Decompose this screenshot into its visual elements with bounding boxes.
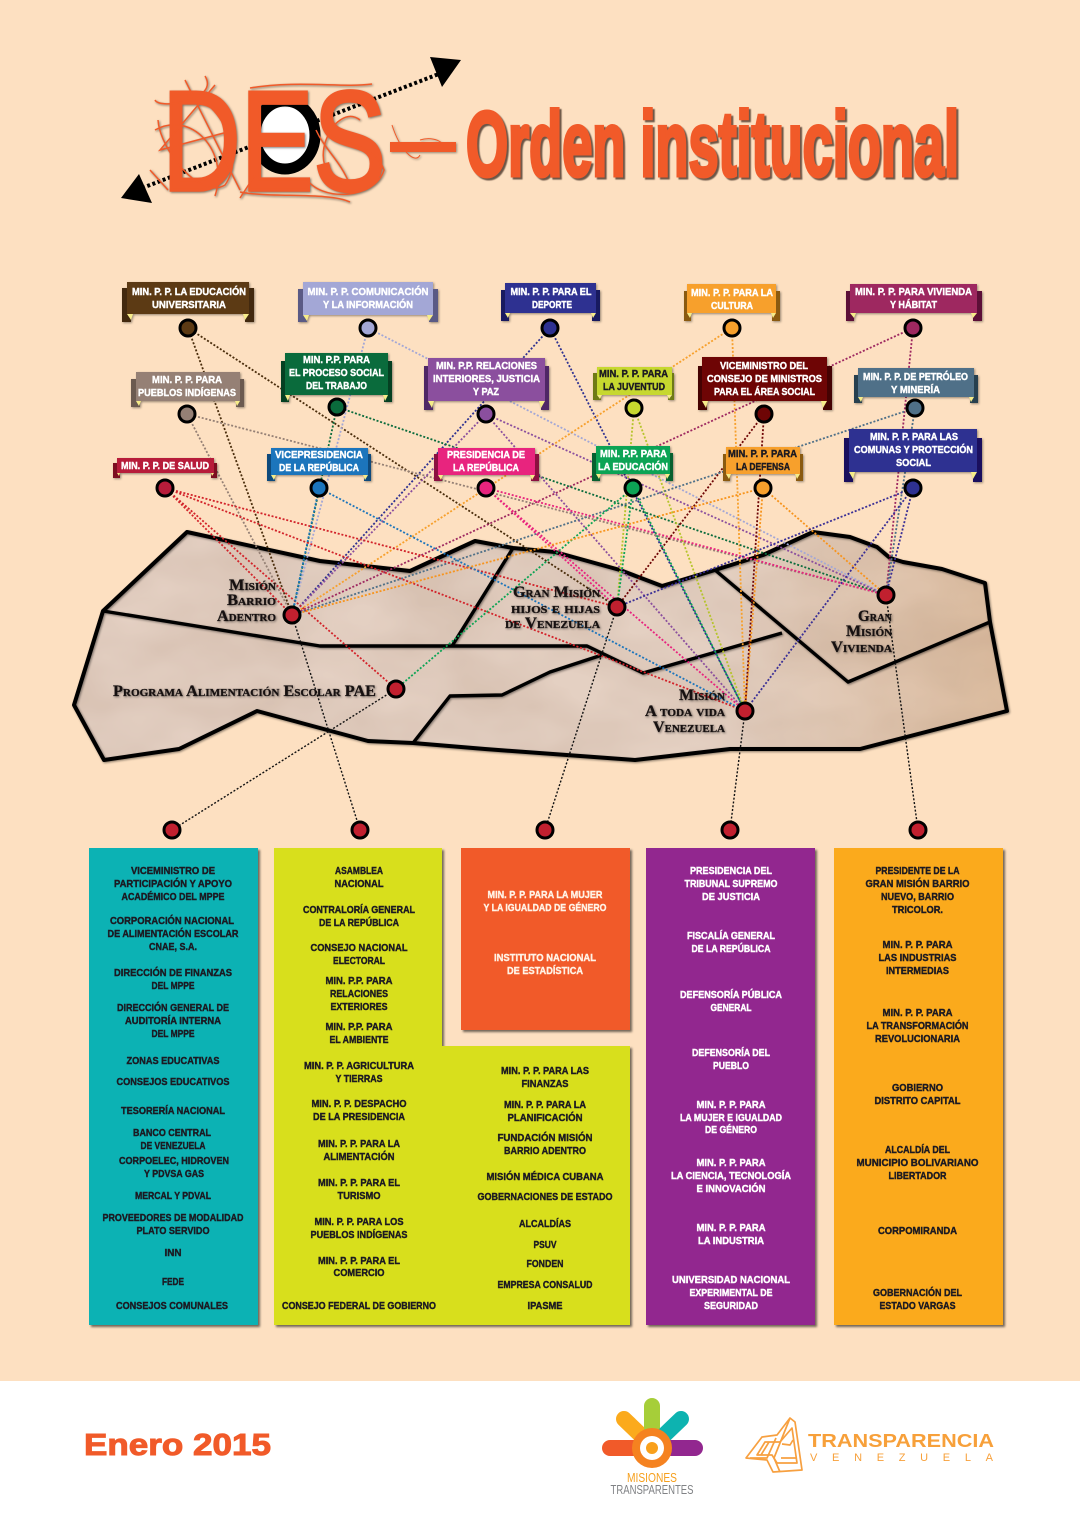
map label: Misión A toda vida Venezuela: Misión (679, 687, 725, 704)
panel: purple list (646, 848, 815, 1325)
banner: pueblos indígenas: PUEBLOS INDÍGENAS (138, 386, 236, 399)
map label: Gran Misión hijos e hijas: de Venezuela (505, 615, 600, 632)
panel: teal list: CNAE, S.A. (149, 941, 197, 953)
icon: double-headed dotted arrow (121, 57, 461, 203)
map of missions (74, 532, 1007, 760)
map outline and regions (74, 532, 1007, 760)
banner: defensa: LA DEFENSA (736, 461, 790, 473)
ministry nodes (157, 320, 923, 496)
line: youth (617, 408, 745, 711)
banner: educación universitaria: MIN. P. P. LA EDUCACIÓN (132, 285, 246, 298)
banner: cultura (684, 284, 780, 321)
map label: Gran Misión hijos e hijas (505, 584, 600, 632)
panel: lime list: CONSEJO FEDERAL DE GOBIERNO (282, 1300, 436, 1312)
mission nodes (284, 587, 894, 719)
line: health (165, 488, 745, 711)
panel: teal list: DEL MPPE (152, 1028, 194, 1040)
panel: teal list: Y PDVSA GAS (144, 1168, 204, 1180)
banner: vivienda: Y HÁBITAT (890, 298, 938, 311)
panel: teal list: FEDE (162, 1276, 184, 1288)
banner: relaciones interiores: Y PAZ (473, 386, 500, 398)
panel: amber list: CORPOMIRANDA (878, 1225, 957, 1237)
banner: viceministro consejo: CONSEJO DE MINISTROS (707, 373, 822, 385)
panel: lime list: CONSEJO NACIONAL (310, 942, 408, 954)
logo: Transparencia Venezuela (746, 1418, 994, 1472)
banner: comunas: COMUNAS Y PROTECCIÓN (854, 443, 973, 456)
panel: purple list: DEFENSORÍA DEL (692, 1046, 770, 1059)
banner: relaciones interiores: INTERIORES, JUSTICIA (433, 373, 540, 385)
panel: purple list: DE JUSTICIA (702, 891, 760, 903)
panel: lime list: Y TIERRAS (336, 1073, 382, 1085)
panel: lime list: GOBERNACIONES DE ESTADO (478, 1191, 612, 1203)
banner: viceministro consejo (698, 357, 832, 410)
panel: teal list: MERCAL Y PDVAL (135, 1190, 211, 1202)
banner: petróleo y minería: Y MINERÍA (891, 383, 940, 396)
panel: lime list: MIN. P. P. PARA LOS (314, 1216, 404, 1228)
panel: purple list: UNIVERSIDAD NACIONAL (672, 1274, 791, 1286)
panel: lime list: EL AMBIENTE (330, 1034, 388, 1046)
banner: proceso social del trabajo: MIN. P.P. PARA (303, 354, 370, 366)
line: indigenous (187, 414, 886, 615)
panel: amber list: INTERMEDIAS (886, 965, 949, 977)
banner: juventud: LA JUVENTUD (603, 381, 665, 393)
panel: amber list: MIN. P. P. PARA (882, 1007, 953, 1019)
panel: purple list: EXPERIMENTAL DE (690, 1287, 772, 1299)
date: Enero 2015: Enero 2015 (84, 1427, 271, 1462)
panel: purple list: PRESIDENCIA DEL (690, 865, 772, 877)
panel: teal list: CORPOELEC, HIDROVEN (119, 1155, 229, 1167)
banner: defensa: MIN. P. P. PARA (728, 448, 797, 460)
panel: lime list (274, 848, 630, 1325)
line: defence (292, 488, 886, 711)
banner: defensa (723, 447, 803, 481)
panel: purple list: TRIBUNAL SUPREMO (684, 878, 778, 890)
panel: amber list: LAS INDUSTRIAS (878, 952, 956, 964)
panel: lime list: PSUV (534, 1239, 556, 1251)
banner: proceso social del trabajo (281, 353, 392, 402)
banner: vicepresidencia: VICEPRESIDENCIA (275, 449, 363, 461)
panel: lime list: IPASME (528, 1300, 562, 1312)
panel: purple list: SEGURIDAD (704, 1300, 758, 1312)
panel: lime list: NACIONAL (334, 878, 384, 890)
panel: orange list: INSTITUTO NACIONAL (494, 952, 597, 964)
panel: purple list: E INNOVACIÓN (696, 1182, 766, 1195)
map paper shape (74, 532, 1007, 760)
panel: purple list: LA INDUSTRIA (698, 1235, 764, 1247)
panel: purple list: FISCALÍA GENERAL (687, 929, 776, 942)
lower connector nodes (164, 822, 926, 838)
banner: presidencia: LA REPÚBLICA (453, 461, 519, 474)
panel: lime list: EXTERIORES (330, 1001, 388, 1013)
panel: lime list: MIN. P. P. AGRICULTURA (304, 1060, 414, 1072)
map label: Gran Misión hijos e hijas: Gran Misión (513, 584, 600, 601)
panel: amber list: LA TRANSFORMACIÓN (866, 1019, 968, 1032)
banner: cultura: CULTURA (711, 300, 753, 312)
panel: orange list: DE ESTADÍSTICA (507, 964, 583, 977)
panel: lime list: MIN. P. P. PARA LA (318, 1138, 400, 1150)
banner: vivienda (846, 284, 982, 321)
banner: educación universitaria: UNIVERSITARIA (152, 299, 226, 311)
panel: purple list: LA MUJER E IGUALDAD (680, 1112, 782, 1124)
map label: Gran Misión Vivienda (831, 608, 892, 656)
panel: purple list: GENERAL (710, 1002, 752, 1014)
banner: comunas (844, 429, 982, 482)
icon: impossible shape (746, 1418, 802, 1472)
panel: amber list: TRICOLOR. (892, 904, 943, 916)
banner: viceministro consejo: VICEMINISTRO DEL (720, 360, 809, 372)
panel: teal list: PROVEEDORES DE MODALIDAD (102, 1212, 244, 1224)
panel: amber list: ESTADO VARGAS (880, 1300, 956, 1312)
banner: deporte (501, 283, 600, 321)
panel: amber list: ALCALDÍA DEL (885, 1143, 950, 1156)
heading: dash (390, 125, 456, 158)
banner: comunicación: Y LA INFORMACIÓN (323, 298, 413, 311)
panel: teal list: CORPORACIÓN NACIONAL (110, 914, 235, 927)
panel: teal list: PARTICIPACIÓN Y APOYO (114, 877, 232, 890)
line: sport (292, 328, 745, 711)
map label: Misión Barrio Adentro: Barrio (227, 592, 276, 609)
banner: proceso social del trabajo: DEL TRABAJO (306, 380, 367, 392)
banner: presidencia (434, 448, 539, 481)
banner: educación universitaria (122, 282, 254, 322)
panel: amber list: DISTRITO CAPITAL (874, 1095, 961, 1107)
panel: teal list: DE ALIMENTACIÓN ESCOLAR (108, 927, 239, 940)
panel: lime list: MIN. P. P. PARA EL (318, 1255, 401, 1267)
panel: lime list: DE LA PRESIDENCIA (313, 1111, 405, 1123)
line: culture (292, 328, 745, 711)
panel: amber list: PRESIDENTE DE LA (876, 865, 960, 877)
map label: Programa Alimentación Escolar: Programa Alimentación Escolar PAE (113, 683, 376, 700)
banner: presidencia: PRESIDENCIA DE (447, 449, 525, 461)
panel: teal list: DE VENEZUELA (140, 1140, 206, 1152)
line: education univ. (188, 328, 617, 615)
panel: amber list: GOBIERNO (892, 1082, 943, 1094)
panel: lime list: COMERCIO (334, 1267, 384, 1279)
map label: Gran Misión Vivienda: Misión (846, 623, 892, 640)
map label: Misión A toda vida Venezuela (645, 687, 725, 736)
line: interior relations (292, 414, 886, 711)
panel: lime list: DE LA REPÚBLICA (319, 916, 399, 929)
panel: lime list: MIN. P. P. PARA LAS (501, 1065, 589, 1077)
panel: teal list: TESORERÍA NACIONAL (121, 1104, 226, 1117)
logo: Misiones Transparentes: MISIONES (627, 1471, 677, 1485)
panel: lime list: BARRIO ADENTRO (504, 1145, 586, 1157)
panel: lime list: MIN. P.P. PARA (326, 1021, 393, 1033)
logo: Transparencia Venezuela: VENEZUELA (810, 1452, 994, 1464)
banner: relaciones interiores (424, 358, 549, 410)
panel: teal list: CONSEJOS EDUCATIVOS (116, 1076, 230, 1088)
panel: amber list: LIBERTADOR (888, 1170, 947, 1182)
panel: purple list: DE LA REPÚBLICA (692, 942, 771, 955)
panel: lime list: MIN. P.P. PARA (326, 975, 393, 987)
map label: Gran Misión hijos e hijas: hijos e hijas (511, 600, 600, 617)
banner: petróleo y minería: MIN. P. P. DE PETRÓLEO (863, 370, 968, 383)
banner: viceministro consejo: PARA EL ÁREA SOCIAL (714, 385, 815, 398)
logo: Transparencia Venezuela: TRANSPARENCIA (808, 1431, 994, 1451)
banner: proceso social del trabajo: EL PROCESO SOCIAL (289, 367, 384, 379)
line: communes (617, 488, 913, 711)
line: vice-presidency (292, 488, 745, 711)
panel: purple list: DE GÉNERO (705, 1123, 757, 1136)
panel: teal list: VICEMINISTRO DE (131, 865, 215, 877)
panel: teal list: DIRECCIÓN DE FINANZAS (114, 966, 232, 979)
panel: amber list: GRAN MISIÓN BARRIO (866, 877, 970, 890)
map label: Gran Misión Vivienda: Vivienda (831, 639, 892, 656)
title: DES-Orden institucional (121, 57, 959, 221)
banner: educación: MIN. P.P. PARA (600, 448, 667, 460)
panel: purple list: LA CIENCIA, TECNOLOGÍA (671, 1169, 791, 1182)
panel: lime list: MIN. P. P. DESPACHO (312, 1098, 406, 1110)
heading: DES scribbled letters: DES (162, 62, 386, 221)
footer band (0, 1381, 1080, 1513)
banner: pueblos indígenas (131, 372, 244, 407)
panel: teal list: ACADÉMICO DEL MPPE (122, 890, 224, 903)
lines: missions to lower nodes (172, 595, 918, 830)
banner: comunicación: MIN. P. P. COMUNICACIÓN (308, 285, 428, 298)
banner: juventud: MIN. P. P. PARA (599, 368, 668, 380)
banner: comunicación (298, 282, 438, 322)
panel: amber list: MIN. P. P. PARA (882, 939, 953, 951)
banner: salud: MIN. P. P. DE SALUD (121, 460, 209, 472)
banner: petróleo y minería (854, 368, 978, 403)
banner: comunas: MIN. P. P. PARA LAS (870, 431, 958, 443)
panel: lime list: MIN. P. P. PARA EL (318, 1177, 401, 1189)
panel: orange list: Y LA IGUALDAD DE GÉNERO (484, 901, 606, 914)
panel: orange list (461, 848, 630, 1030)
banner: vicepresidencia (267, 448, 371, 481)
logo: Misiones Transparentes (610, 1406, 695, 1497)
panel: lime list: FINANZAS (522, 1078, 568, 1090)
panel: lime list: EMPRESA CONSALUD (498, 1279, 593, 1291)
line: vice-minister (617, 414, 764, 711)
banner: relaciones interiores: MIN. P.P. RELACIONES (436, 360, 537, 372)
panel: amber list: REVOLUCIONARIA (875, 1033, 960, 1045)
banner: deporte: DEPORTE (532, 299, 572, 311)
panel: amber list: NUEVO, BARRIO (881, 891, 954, 903)
line: presidency (486, 488, 886, 711)
panel: lime list: FONDEN (526, 1258, 564, 1270)
connection lines: ministries to missions (165, 328, 918, 830)
panel: amber list (834, 848, 1003, 1325)
panel: lime list: RELACIONES (330, 988, 388, 1000)
logo: Misiones Transparentes: TRANSPARENTES (610, 1483, 694, 1497)
panel: orange list: MIN. P. P. PARA LA MUJER (488, 889, 603, 901)
panel: lime list: MISIÓN MÉDICA CUBANA (486, 1170, 604, 1183)
banner: salud (113, 458, 217, 478)
panel: teal list (89, 848, 258, 1325)
map label: Misión A toda vida Venezuela: A toda vida (645, 703, 725, 720)
panel: teal list: PLATO SERVIDO (136, 1225, 210, 1237)
ministry banners (113, 282, 982, 482)
panel: lime list: ELECTORAL (333, 955, 385, 967)
banner: deporte: MIN. P. P. PARA EL (510, 286, 592, 298)
panel: purple list: MIN. P. P. PARA (696, 1222, 766, 1234)
map label: Gran Misión Vivienda: Gran (858, 608, 892, 625)
panel: purple list: MIN. P. P. PARA (696, 1099, 766, 1111)
map label: Misión A toda vida Venezuela: Venezuela (653, 719, 725, 736)
panel: amber list: MUNICIPIO BOLIVARIANO (856, 1157, 978, 1169)
map label: Misión Barrio Adentro (217, 577, 276, 625)
banner: pueblos indígenas: MIN. P. P. PARA (152, 374, 222, 386)
panel: teal list: DIRECCIÓN GENERAL DE (117, 1001, 229, 1014)
panel: lime list: PUEBLOS INDÍGENAS (310, 1228, 408, 1241)
banner: educación (592, 446, 673, 481)
line: communication (292, 328, 886, 615)
panel: lime list: ALIMENTACIÓN (324, 1150, 394, 1163)
panel: lime list: ALCALDÍAS (519, 1217, 571, 1230)
panel: purple list: PUEBLO (713, 1060, 749, 1072)
icon: eye ring (255, 101, 315, 169)
panel: teal list: INN (164, 1247, 182, 1259)
map label: Misión Barrio Adentro: Misión (229, 577, 276, 594)
line: housing (292, 328, 913, 615)
banner: vivienda: MIN. P. P. PARA VIVIENDA (855, 286, 972, 298)
banner: vicepresidencia: DE LA REPÚBLICA (279, 461, 359, 474)
banner: cultura: MIN. P. P. PARA LA (691, 287, 773, 299)
map label: Misión Barrio Adentro: Adentro (217, 608, 276, 625)
panel: lime list: FUNDACIÓN MISIÓN (498, 1131, 592, 1144)
panel: purple list: DEFENSORÍA PÚBLICA (680, 988, 782, 1001)
panel: amber list: GOBERNACIÓN DEL (873, 1286, 962, 1299)
panel: teal list: ZONAS EDUCATIVAS (126, 1055, 220, 1067)
line: petroleum (292, 408, 915, 615)
panel: lime list: PLANIFICACIÓN (508, 1111, 582, 1124)
panel: purple list: MIN. P. P. PARA (696, 1157, 766, 1169)
banner: juventud (593, 367, 674, 400)
line: labour (292, 407, 886, 615)
panel: teal list: DEL MPPE (152, 980, 194, 992)
panel: lime list: ASAMBLEA (335, 865, 383, 877)
banner: educación: LA EDUCACIÓN (598, 460, 668, 473)
panel: lime list: CONTRALORÍA GENERAL (303, 903, 415, 916)
line: education (396, 488, 745, 711)
panel: lime list: MIN. P. P. PARA LA (504, 1099, 586, 1111)
banner: comunas: SOCIAL (896, 457, 932, 469)
panel: teal list: BANCO CENTRAL (133, 1127, 211, 1139)
panel: teal list: AUDITORÍA INTERNA (125, 1014, 221, 1027)
panel: teal list: CONSEJOS COMUNALES (116, 1300, 228, 1312)
panel: lime list: TURISMO (338, 1190, 380, 1202)
